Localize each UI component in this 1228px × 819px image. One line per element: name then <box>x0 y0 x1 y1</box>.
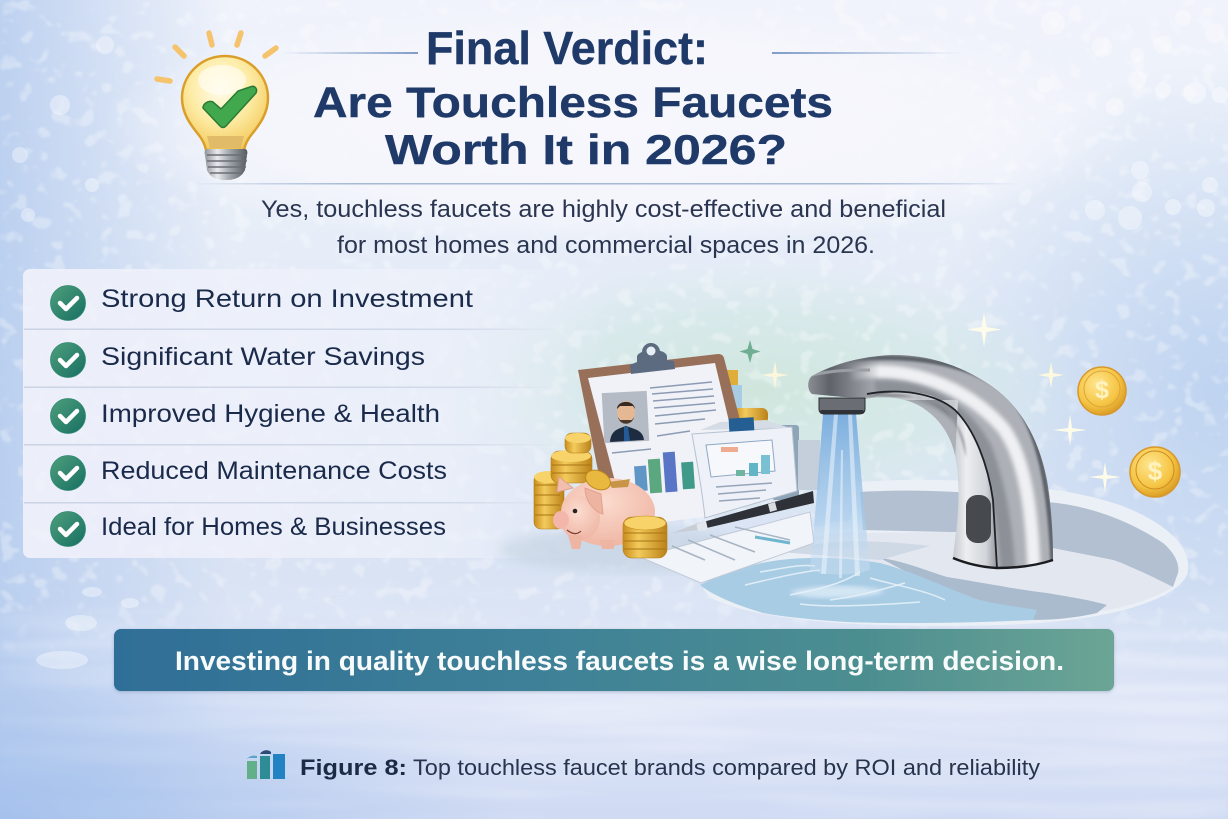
financial paper <box>640 512 814 583</box>
spout body <box>808 355 1053 567</box>
water stream <box>790 414 885 598</box>
intro text: for most homes and commercial spaces in 2026. <box>337 232 875 259</box>
motion sensor <box>966 495 991 543</box>
figure caption: Figure 8: <box>300 755 407 780</box>
title: Worth It in 2026? <box>385 126 787 173</box>
water ripples <box>745 565 945 606</box>
benefit: strong return on investment <box>50 285 473 320</box>
benefit: ideal for homes and businesses <box>50 512 446 546</box>
title <box>313 22 833 173</box>
benefit: reduced maintenance costs <box>50 456 447 490</box>
figure caption: Top touchless faucet brands compared by ROI and reliability <box>413 755 1040 780</box>
icon: gold dollar coin: $ <box>1095 376 1109 404</box>
coin stacks <box>534 433 592 529</box>
icon: gold dollar coin <box>1078 367 1126 415</box>
benefit: reduced maintenance costs: Reduced Maintenance Costs <box>101 457 447 485</box>
basin wall <box>860 491 1178 587</box>
spout underside <box>865 392 997 572</box>
sparkles <box>740 312 1121 492</box>
piggy bank <box>553 466 655 549</box>
icon: light rays <box>157 33 276 81</box>
nozzle <box>819 398 865 414</box>
front coin stack <box>623 516 667 558</box>
shaded water band <box>880 558 1107 620</box>
title: Are Touchless Faucets <box>313 79 833 127</box>
intro text: Yes, touchless faucets are highly cost-effective and beneficial <box>261 196 946 223</box>
benefit: strong return on investment: Strong Return on Investment <box>101 285 473 313</box>
bar chart <box>634 452 695 493</box>
water pool <box>700 558 1037 623</box>
icon: gold dollar coin <box>1130 447 1180 497</box>
sink basin <box>700 480 1188 626</box>
basin floor <box>800 532 1173 620</box>
icon: gold dollar coin: $ <box>1148 456 1163 486</box>
banner: Investing in quality touchless faucets is a wise long-term decision. <box>175 646 1064 676</box>
back coins and folder <box>726 370 820 500</box>
benefit: significant water savings: Significant Water Savings <box>101 343 425 371</box>
intro text <box>261 196 946 259</box>
benefit: improved hygiene and health: Improved Hygiene & Health <box>101 400 440 428</box>
documents and savings group <box>500 343 820 583</box>
figure caption <box>247 750 1040 780</box>
bokeh circles <box>12 10 1228 669</box>
benefit: significant water savings <box>50 342 425 378</box>
report sheet <box>692 417 797 518</box>
panel: benefits list <box>23 269 613 558</box>
benefit: ideal for homes and businesses: Ideal for Homes & Businesses <box>101 513 446 541</box>
sink rim <box>703 480 1188 626</box>
icon: light bulb with check mark <box>157 33 276 180</box>
title: Final Verdict: <box>426 22 708 74</box>
pen <box>672 491 814 533</box>
faucet <box>808 355 1054 570</box>
benefit: improved hygiene and health <box>50 398 440 434</box>
title rules <box>190 52 1020 184</box>
clipboard <box>578 343 740 522</box>
icon: bar chart <box>247 750 285 779</box>
banner <box>114 629 1114 691</box>
